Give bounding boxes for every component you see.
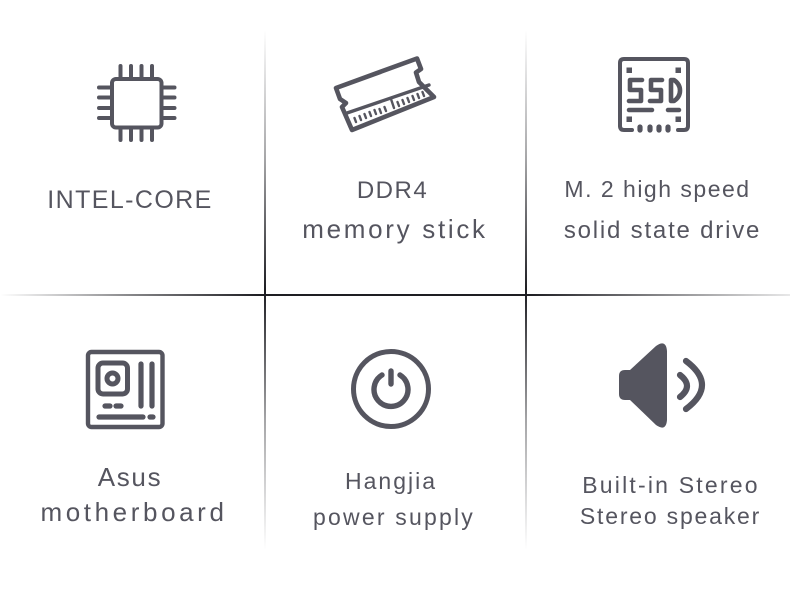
text: Stereo speaker [580, 503, 761, 529]
text: memory stick [302, 214, 488, 244]
text: solid state drive [564, 217, 761, 244]
label: Hangjia power supply: Hangjia [345, 468, 437, 494]
label: M.2 SSD: M. 2 high speed [564, 176, 751, 202]
label: DDR4 memory stick: DDR4 [357, 177, 428, 204]
icon: CPU chip [97, 64, 176, 142]
icon: RAM memory stick [334, 56, 436, 132]
icon: motherboard [86, 350, 165, 430]
label: Asus motherboard: Asus [98, 462, 162, 492]
label: Built-in Stereo speaker: Built-in Stereo [582, 472, 760, 498]
icon: SSD [618, 57, 690, 133]
label: INTEL-CORE: INTEL-CORE [47, 186, 213, 214]
icon: speaker [619, 343, 706, 428]
icon: power button [351, 349, 431, 429]
text: motherboard [40, 497, 228, 527]
text: power supply [313, 504, 475, 530]
